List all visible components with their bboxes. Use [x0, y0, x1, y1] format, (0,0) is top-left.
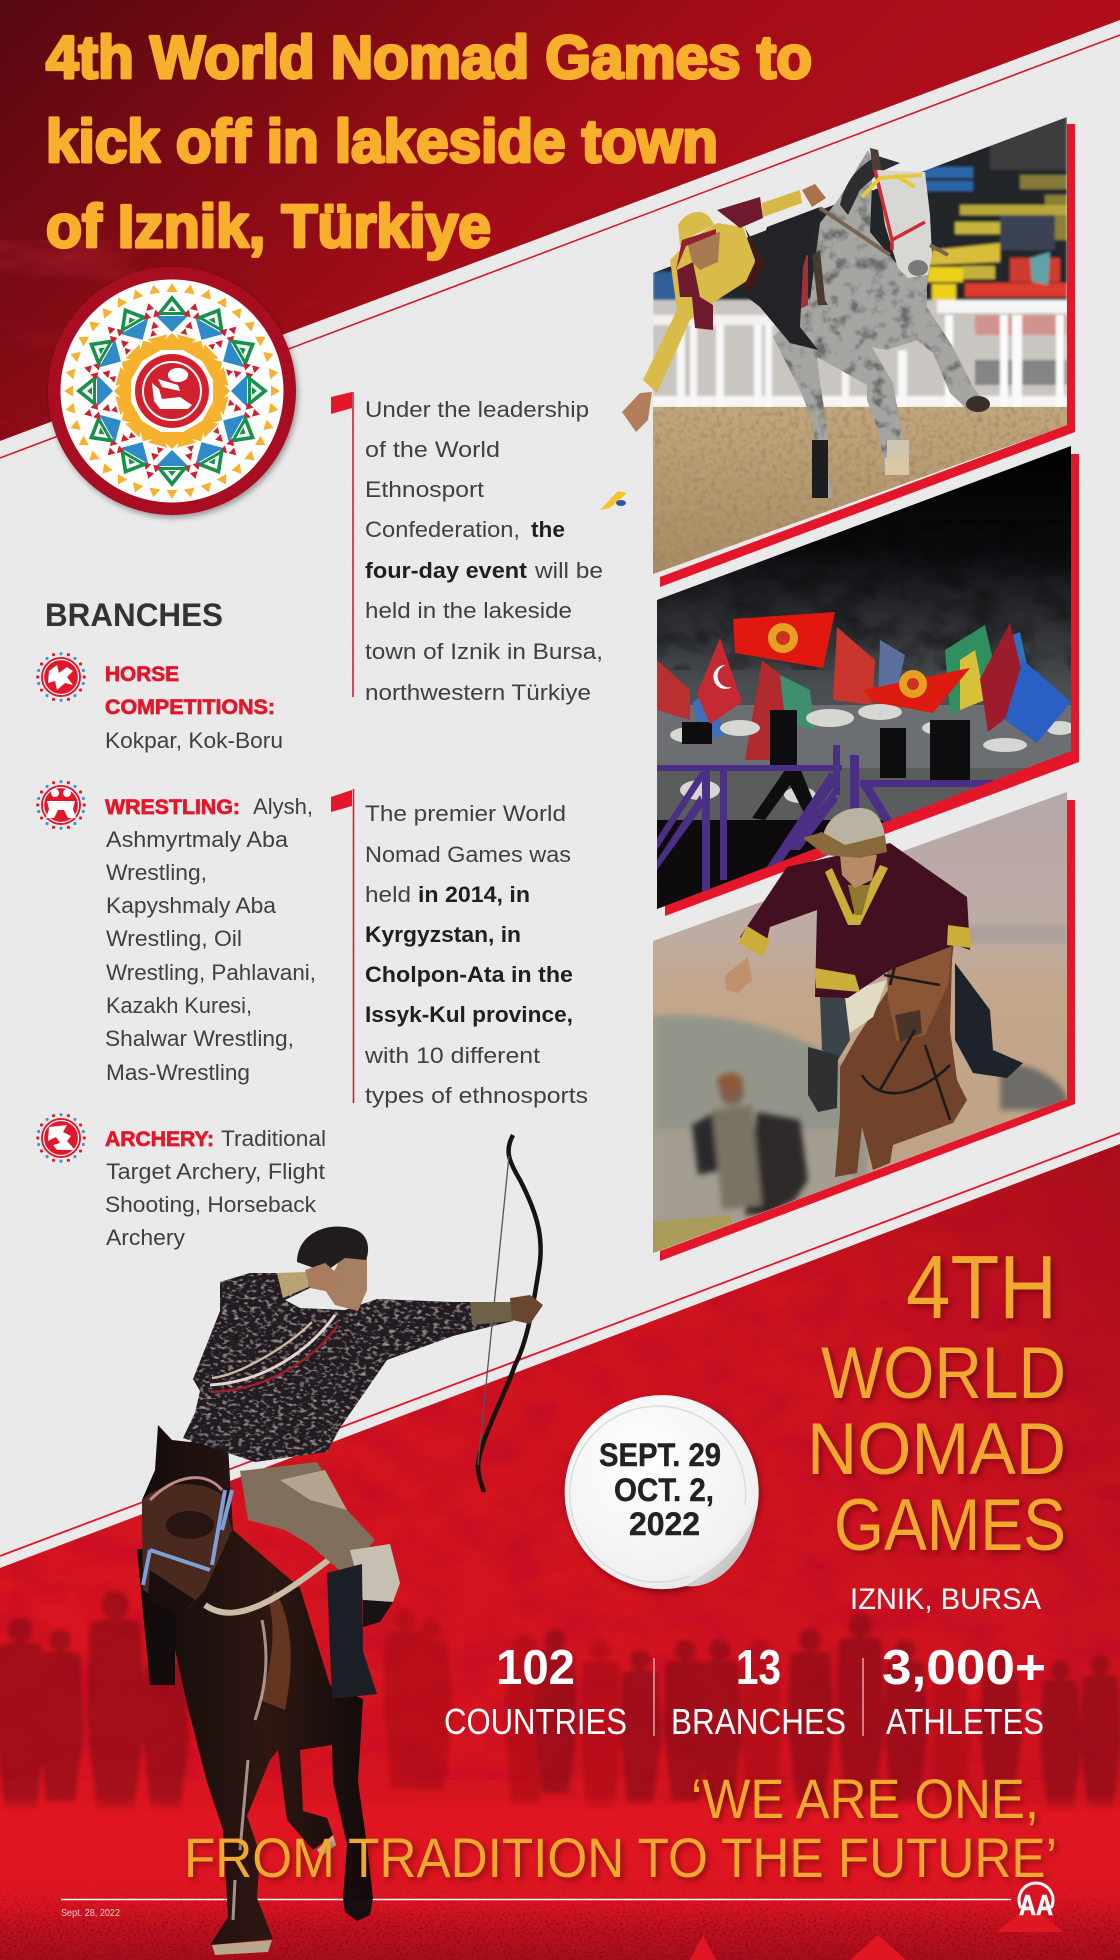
bow [478, 1135, 541, 1492]
title [46, 24, 812, 260]
rider head and hands [297, 1227, 543, 1324]
title: of Iznik, Türkiye [46, 193, 491, 260]
stat: branches: BRANCHES [671, 1701, 846, 1742]
stat: countries: 102 [496, 1641, 575, 1695]
paragraph: about the event: Under the leadership [365, 397, 589, 422]
stat: branches [671, 1641, 846, 1742]
event name heading: NOMAD [807, 1409, 1066, 1490]
paragraph: about the event: Ethnosport [365, 477, 484, 502]
saddle cloth and bag [240, 1462, 400, 1627]
branch: horse competitions [36, 652, 283, 753]
paragraph: history of the games: types of ethnosports [365, 1083, 588, 1108]
paragraph: history of the games: The premier World [365, 801, 566, 826]
branch: wrestling: Mas-Wrestling [106, 1060, 250, 1085]
photo 3: rider galloping toward camera [653, 790, 1075, 1261]
branch: wrestling: Kapyshmaly Aba [106, 893, 277, 918]
branch: horse competitions: HORSE [105, 663, 179, 686]
horse [137, 1425, 373, 1955]
rider jacket [183, 1272, 513, 1462]
footer rule and date: Sept. 28, 2022 [61, 1908, 120, 1919]
paragraph: about the event: the [531, 517, 565, 542]
paragraph: about the event [331, 392, 603, 705]
paragraph: history of the games: Cholpon-Ata in the [365, 962, 573, 987]
rider in yellow [622, 184, 826, 432]
branch: wrestling [36, 780, 316, 1085]
branch: archery: Shooting, Horseback [105, 1192, 317, 1217]
paragraph: history of the games: Kyrgyzstan, in [365, 922, 521, 947]
date sticker: 2022 [629, 1506, 700, 1542]
paragraph: history of the games [331, 789, 588, 1108]
branches heading: BRANCHES [45, 597, 223, 633]
paragraph: about the event: town of Iznik in Bursa, [365, 639, 603, 664]
paragraph: about the event: of the World [365, 437, 500, 462]
branch: horse competitions: COMPETITIONS: [105, 696, 275, 719]
paragraph: about the event: will be [534, 558, 603, 583]
branch: wrestling: Kazakh Kuresi, [106, 993, 252, 1018]
paragraph: about the event: four-day event [365, 558, 528, 583]
paragraph: history of the games: Nomad Games was [365, 842, 571, 867]
branch: wrestling: Ashmyrtmaly Aba [106, 827, 289, 852]
event name heading [807, 1238, 1066, 1566]
emblem logo [48, 267, 296, 515]
stat: athletes: ATHLETES [886, 1701, 1044, 1742]
rider leg and boot [327, 1564, 377, 1699]
title: kick off in lakeside town [46, 108, 718, 175]
location: IZNIK, BURSA [850, 1583, 1041, 1616]
slogan [184, 1767, 1057, 1889]
icon: agency logo: AA [1019, 1890, 1053, 1922]
paragraph: about the event: held in the lakeside [365, 598, 572, 623]
archer on horseback [137, 1135, 543, 1955]
date sticker: SEPT. 29 [599, 1437, 721, 1473]
paragraph: history of the games: in 2014, in [418, 882, 530, 907]
icon: agency logo [1019, 1883, 1053, 1922]
date sticker [565, 1395, 759, 1589]
branch: wrestling: WRESTLING: [105, 796, 240, 819]
bottom red section with crowd [0, 1133, 1120, 1960]
stat: athletes: 3,000+ [882, 1641, 1046, 1695]
title: 4th World Nomad Games to [46, 24, 812, 91]
event name heading: GAMES [834, 1485, 1066, 1566]
paragraph: history of the games: Issyk-Kul province, [365, 1002, 573, 1027]
event name heading: WORLD [821, 1333, 1066, 1414]
branch: wrestling: Wrestling, Oil [106, 926, 242, 951]
branch: wrestling: Wrestling, Pahlavani, [106, 960, 316, 985]
stat: countries [444, 1641, 627, 1742]
branch: wrestling: Alysh, [253, 794, 313, 819]
photo 1: rider leaning from grey horse [622, 110, 1075, 587]
top red banner [0, 0, 1120, 458]
photo 2: flag parade in smoke [657, 446, 1079, 920]
slogan: ‘WE ARE ONE, [691, 1767, 1039, 1830]
branch: archery: Archery [106, 1225, 185, 1250]
paragraph: history of the games: with 10 different [364, 1043, 540, 1068]
branch: archery: ARCHERY: [105, 1128, 214, 1151]
rider in maroon jacket [725, 808, 1023, 1112]
stat: countries: COUNTRIES [444, 1701, 627, 1742]
paragraph: about the event: northwestern Türkiye [365, 680, 591, 705]
branch: horse competitions: Kokpar, Kok-Boru [105, 728, 283, 753]
brown horse [835, 902, 967, 1177]
branch: wrestling: Shalwar Wrestling, [105, 1026, 294, 1051]
branch: wrestling: Wrestling, [106, 860, 207, 885]
stat dividers [654, 1658, 863, 1736]
stat: branches: 13 [736, 1641, 781, 1695]
date sticker: OCT. 2, [614, 1472, 714, 1508]
event name heading: 4TH [906, 1238, 1057, 1338]
branch: archery [36, 1113, 326, 1250]
branch: archery: Target Archery, Flight [106, 1159, 325, 1184]
stat: athletes [882, 1641, 1046, 1742]
grey horse [773, 148, 990, 498]
paragraph: about the event: Confederation, [365, 517, 520, 542]
slogan: FROM TRADITION TO THE FUTURE’ [184, 1826, 1057, 1889]
stray artifact mark [600, 491, 627, 510]
branch: archery: Traditional [221, 1126, 326, 1151]
paragraph: history of the games: held [365, 882, 411, 907]
